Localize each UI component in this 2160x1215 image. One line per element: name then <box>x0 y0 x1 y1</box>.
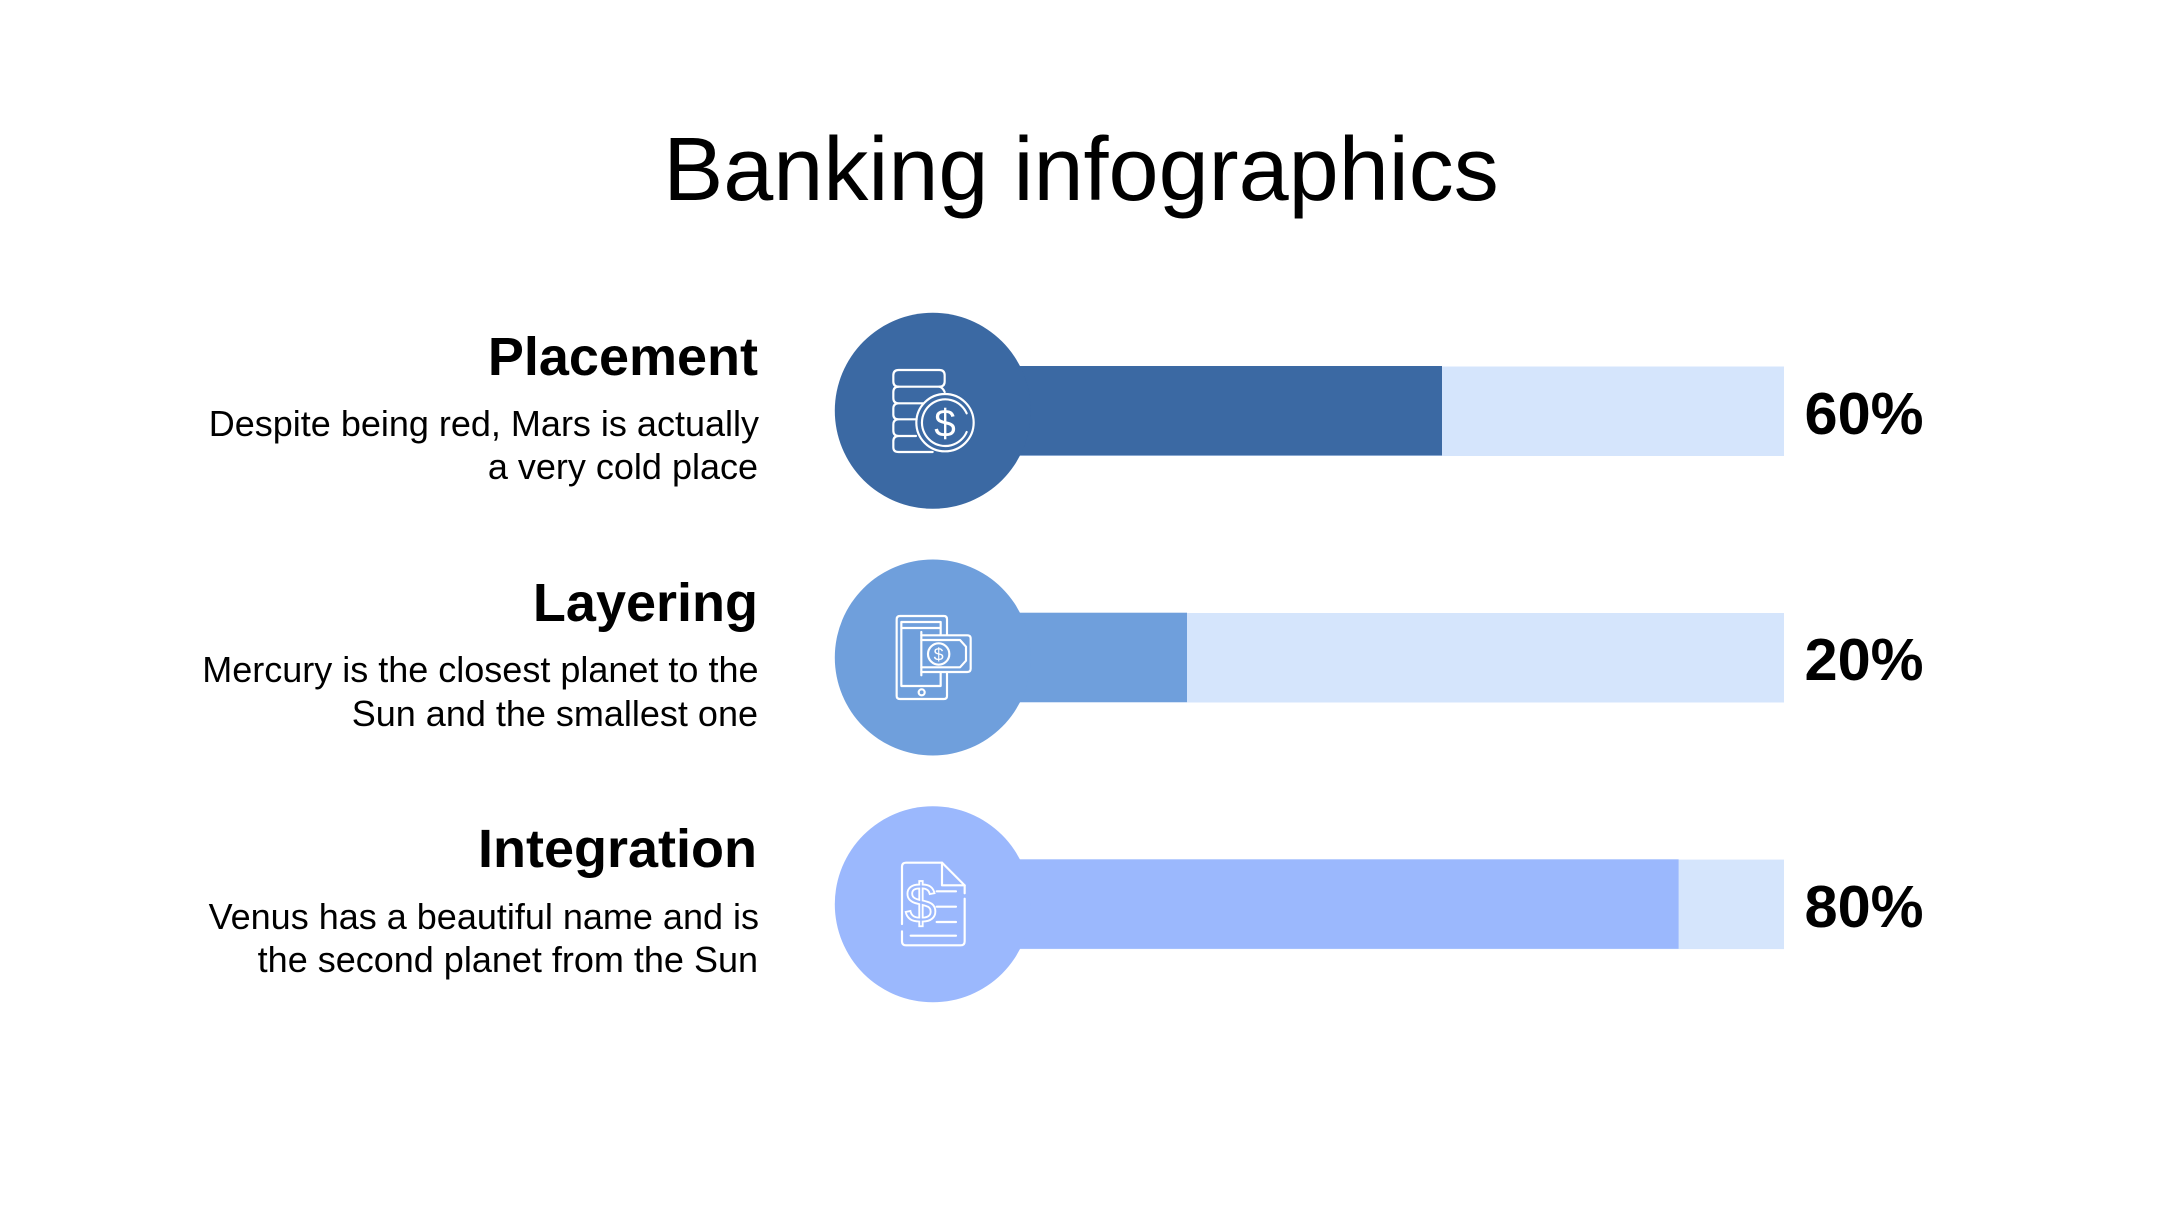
circle badge: Integration <box>835 806 1031 1002</box>
text block: Placement <box>209 327 759 487</box>
text block: Integration <box>209 819 759 980</box>
progress track: Placement <box>1000 366 1784 456</box>
progress fill: Placement 60% <box>1000 366 1442 456</box>
text block: Layering <box>202 573 758 734</box>
title: Banking infographics <box>663 120 1499 220</box>
percentage: 80%: 80% <box>1804 873 1924 940</box>
progress track: Integration <box>1000 860 1784 949</box>
circle badge: Layering <box>835 560 1031 756</box>
panel: Layering row <box>202 560 1924 756</box>
text block: Integration: Venus has a beautiful name and is <box>209 896 759 937</box>
panel: Placement row <box>209 313 1924 509</box>
icon: invoice with dollar: $ <box>905 872 936 935</box>
panel: Integration row <box>209 806 1924 1002</box>
text block: Placement: a very cold place <box>488 446 758 487</box>
percentage: 20%: 20% <box>1804 626 1924 693</box>
progress fill: Layering 20% <box>1000 613 1187 702</box>
icon: coin stack: $ <box>934 403 956 446</box>
text block: Layering: Mercury is the closest planet to the <box>202 649 758 690</box>
icon: phone with banknote: $ <box>934 644 944 664</box>
text block: Layering: Layering <box>533 573 758 633</box>
progress track: Layering <box>1000 613 1784 702</box>
text block: Integration: Integration <box>478 819 757 879</box>
text block: Placement: Despite being red, Mars is actually <box>209 403 759 444</box>
icon: coin stack <box>893 370 974 452</box>
icon: invoice with dollar <box>902 863 965 945</box>
percentage: 60%: 60% <box>1804 380 1924 447</box>
text block: Integration: the second planet from the Sun <box>258 939 758 980</box>
text block: Layering: Sun and the smallest one <box>352 693 758 734</box>
circle badge: Placement <box>835 313 1031 509</box>
progress fill: Integration 80% <box>1000 859 1679 949</box>
icon: phone with banknote <box>897 616 971 699</box>
text block: Placement: Placement <box>488 327 758 387</box>
